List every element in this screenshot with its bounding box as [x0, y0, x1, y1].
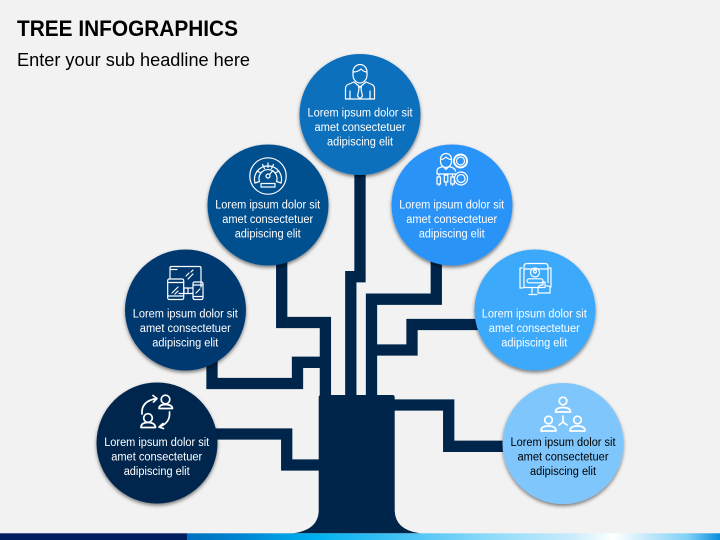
label — [104, 437, 210, 478]
icon: speedometer — [250, 158, 286, 194]
node: middle left — [125, 250, 246, 370]
label: amet consectetuer — [140, 323, 231, 335]
label: amet consectetuer — [111, 451, 202, 463]
node: lower right — [502, 383, 624, 504]
icon: businessman — [346, 64, 374, 99]
label: adipiscing elit — [152, 337, 219, 349]
label: adipiscing elit — [124, 466, 190, 478]
label: amet consectetuer — [222, 214, 313, 226]
label: amet consectetuer — [489, 323, 580, 335]
icon: profile on monitor — [520, 264, 551, 294]
label — [399, 200, 505, 240]
bottom colour bar — [0, 533, 720, 540]
icon: analyst with gear and coin — [437, 154, 468, 186]
node: middle right — [474, 250, 596, 370]
label — [133, 308, 239, 349]
branches — [210, 170, 510, 465]
node: lower left — [96, 382, 218, 504]
node: upper left — [208, 144, 328, 266]
label — [308, 108, 413, 148]
label: Lorem ipsum dolor sit — [482, 308, 588, 320]
label: Lorem ipsum dolor sit — [308, 108, 413, 120]
icon: responsive devices — [168, 266, 203, 300]
title: TREE INFOGRAPHICS — [17, 16, 238, 41]
label: Lorem ipsum dolor sit — [510, 437, 616, 449]
label: adipiscing elit — [530, 466, 597, 478]
label: amet consectetuer — [314, 122, 406, 134]
label: Lorem ipsum dolor sit — [133, 308, 239, 320]
label: Lorem ipsum dolor sit — [215, 200, 321, 212]
label: amet consectetuer — [406, 214, 497, 226]
node: upper right — [392, 144, 512, 266]
label: Lorem ipsum dolor sit — [104, 437, 210, 449]
label: adipiscing elit — [327, 136, 394, 148]
label — [510, 437, 616, 478]
label: Lorem ipsum dolor sit — [399, 200, 505, 212]
icon: exchange between people — [141, 395, 172, 428]
node: top centre — [300, 54, 420, 175]
tree trunk — [293, 395, 420, 533]
label: adipiscing elit — [501, 337, 568, 349]
icon: team network — [541, 397, 585, 431]
label: adipiscing elit — [419, 228, 485, 240]
label — [215, 200, 321, 240]
label: amet consectetuer — [518, 451, 609, 463]
label: adipiscing elit — [235, 228, 301, 240]
sub headline: Enter your sub headline here — [17, 49, 250, 70]
label — [482, 308, 588, 349]
